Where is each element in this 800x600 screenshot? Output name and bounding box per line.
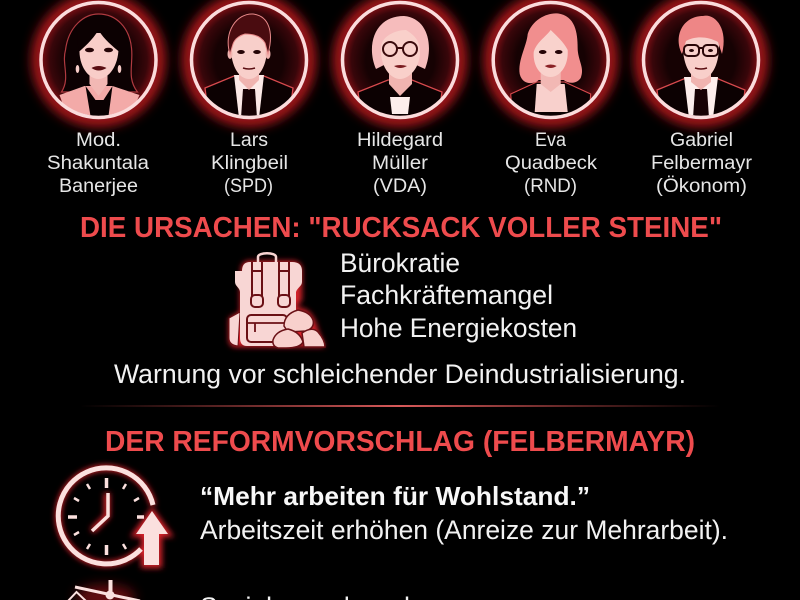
name: Hildegard Müller (VDA) <box>357 130 443 197</box>
name: Gabriel Felbermayr (Ökonom): Felbermayr <box>651 153 753 174</box>
name: Hildegard Müller (VDA): Müller <box>372 153 429 174</box>
name: Mod. Shakuntala Banerjee: Shakuntala <box>47 153 149 174</box>
icon: backpack with stones <box>229 253 325 348</box>
icon: balance scale <box>68 580 140 600</box>
heading: reform proposal: DER REFORMVORSCHLAG (FELBERMAYR) <box>105 426 695 458</box>
portrait: Eva Quadbeck <box>491 0 611 120</box>
heading: causes: DIE URSACHEN: "RUCKSACK VOLLER STEINE" <box>80 212 722 244</box>
list: causes <box>340 248 577 343</box>
list: causes: Fachkräftemangel <box>340 280 553 310</box>
name: Lars Klingbeil (SPD) <box>211 130 288 197</box>
name: Gabriel Felbermayr (Ökonom) <box>651 130 753 197</box>
name: Eva Quadbeck (RND): (RND) <box>524 176 577 197</box>
name: Hildegard Müller (VDA): Hildegard <box>357 130 443 151</box>
portrait: Hildegard Müller <box>340 0 460 120</box>
name: Hildegard Müller (VDA): (VDA) <box>373 176 427 197</box>
quote: more work: “Mehr arbeiten für Wohlstand.” <box>200 481 590 511</box>
name: Gabriel Felbermayr (Ökonom): (Ökonom) <box>656 176 747 197</box>
text: working hours: Arbeitszeit erhöhen (Anreize zur Mehrarbeit). <box>200 515 728 545</box>
warning text: Warnung vor schleichender Deindustrialisierung. <box>114 359 686 389</box>
name: Mod. Shakuntala Banerjee <box>47 130 149 197</box>
icon: clock with up arrow <box>58 468 168 565</box>
name: Eva Quadbeck (RND): Quadbeck <box>505 153 598 174</box>
portrait: Gabriel Felbermayr <box>641 0 761 120</box>
name: Lars Klingbeil (SPD): Lars <box>230 130 268 151</box>
name: Lars Klingbeil (SPD): Klingbeil <box>211 153 288 174</box>
name: Eva Quadbeck (RND): Eva <box>535 130 566 151</box>
name: Eva Quadbeck (RND) <box>505 130 598 197</box>
list: causes: Hohe Energiekosten <box>340 313 577 343</box>
portrait: Shakuntala Banerjee <box>38 0 158 120</box>
name: Mod. Shakuntala Banerjee: Mod. <box>76 130 121 151</box>
name: Lars Klingbeil (SPD): (SPD) <box>224 176 273 197</box>
name: Mod. Shakuntala Banerjee: Banerjee <box>59 176 138 197</box>
name: Gabriel Felbermayr (Ökonom): Gabriel <box>670 130 733 151</box>
list: causes: Bürokratie <box>340 248 460 278</box>
portrait: Lars Klingbeil <box>189 0 309 120</box>
